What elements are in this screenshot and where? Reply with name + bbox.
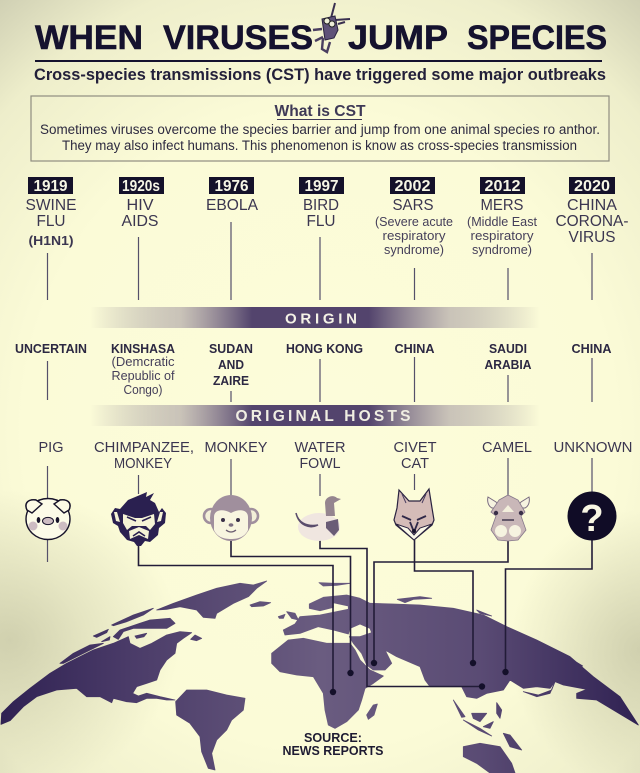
map: Americas: [1, 581, 271, 770]
timeline: 2020 china coronavirus: [556, 177, 628, 300]
timeline: 2002 SARS: [375, 177, 453, 300]
host labels: WATER: [294, 440, 346, 456]
host labels: PIG: [38, 440, 64, 456]
host labels: FOWL: [300, 456, 340, 472]
timeline: 1920s HIV AIDS: HIV: [126, 197, 154, 214]
timeline: 2002 SARS: SARS: [392, 197, 434, 214]
origin row labels: ZAIRE: [213, 374, 249, 388]
origin: Kinshasa: (Demcratic: [112, 355, 174, 369]
icon: civet cat: [394, 489, 434, 540]
panel: what is CST: [31, 96, 609, 161]
timeline: 1920s HIV AIDS: AIDS: [122, 213, 158, 230]
origin row labels: ARABIA: [484, 358, 532, 372]
timeline: 1919 swine flu: FLU: [36, 213, 66, 230]
title: SPECIES: [467, 19, 607, 57]
timeline: 2002 SARS: syndrome): [384, 243, 444, 257]
icon: virus mascot: [313, 3, 350, 52]
origin row labels: CHINA: [394, 342, 434, 356]
origin row labels: AND: [218, 358, 244, 372]
timeline: 1997 bird flu: BIRD: [303, 197, 339, 214]
title: [35, 19, 607, 57]
timeline: 1997 bird flu: 1997: [304, 178, 338, 195]
timeline: 1997 bird flu: FLU: [306, 213, 336, 230]
host labels: UNKNOWN: [554, 440, 632, 456]
timeline: 2002 SARS: (Severe acute: [375, 215, 453, 229]
timeline: 2012 MERS: [467, 177, 538, 300]
origin row labels: SUDAN: [209, 342, 253, 356]
timeline: 2020 china coronavirus: CHINA: [567, 197, 618, 214]
timeline: 1976 ebola: EBOLA: [206, 197, 259, 214]
host labels: CHIMPANZEE,: [94, 440, 194, 456]
connector: camel to Saudi Arabia: [371, 541, 508, 666]
source note: SOURCE:: [304, 730, 362, 745]
title rule: [35, 60, 602, 62]
map: Eurasia and Africa: [272, 583, 638, 773]
timeline: 2012 MERS: respiratory: [470, 229, 534, 243]
host labels: MONKEY: [114, 456, 172, 472]
icon: camel: [488, 495, 529, 541]
heading: origin band: [90, 307, 540, 328]
connector: unknown to China: [502, 540, 592, 675]
origin: Kinshasa: Congo): [124, 383, 162, 397]
origin: Kinshasa: KINSHASA: [111, 342, 175, 356]
timeline: 2002 SARS: respiratory: [382, 229, 446, 243]
origin: Kinshasa: Republic of: [112, 369, 175, 383]
title: JUMP: [348, 19, 448, 57]
title: VIRUSES: [163, 19, 313, 57]
heading: what is CST: What is CST: [274, 103, 366, 120]
world map: [1, 581, 638, 773]
timeline: 1919 swine flu: (H1N1): [28, 234, 74, 248]
icon: unknown question mark: [568, 492, 616, 540]
timeline: 2012 MERS: MERS: [480, 197, 524, 214]
host labels: CIVET: [394, 440, 437, 456]
timeline: 2012 MERS: 2012: [484, 178, 520, 195]
timeline: 2020 china coronavirus: CORONA-: [556, 213, 628, 230]
text: CST description: [40, 122, 600, 153]
timeline: 2012 MERS: (Middle East: [467, 215, 538, 229]
timeline: 2012 MERS: syndrome): [472, 243, 532, 257]
timeline: 1997 bird flu: [299, 177, 344, 300]
icon: chimpanzee: [111, 492, 166, 546]
timeline: 1920s HIV AIDS: 1920s: [122, 178, 160, 195]
timeline: 2020 china coronavirus: 2020: [574, 178, 610, 195]
icon: pig: [26, 498, 70, 540]
host labels: CAMEL: [482, 440, 532, 456]
connector: civet to China: [414, 540, 476, 666]
timeline: 1976 ebola: 1976: [214, 178, 249, 195]
icon: unknown question mark: ?: [580, 498, 604, 540]
connector: monkey to Sudan: [231, 541, 354, 676]
source note: NEWS REPORTS: [282, 743, 384, 758]
origin row labels: CHINA: [572, 342, 612, 356]
origin: Kinshasa: [111, 342, 175, 397]
host labels: CAT: [401, 456, 429, 472]
origin row labels: SAUDI: [489, 342, 527, 356]
connector: chimpanzee to Africa: [138, 546, 336, 695]
icon: water fowl: [296, 496, 341, 541]
timeline: 1919 swine flu: SWINE: [26, 197, 76, 214]
host stem lines: [48, 458, 592, 562]
timeline: 2002 SARS: 2002: [394, 178, 430, 195]
timeline: 2020 china coronavirus: VIRUS: [568, 229, 616, 246]
host labels: [38, 440, 632, 472]
timeline: 1919 swine flu: 1919: [34, 178, 68, 195]
timeline: 1919 swine flu: [26, 177, 76, 300]
timeline: 1976 ebola: [206, 177, 259, 300]
source note: [282, 730, 384, 758]
text: CST description: They may also infect humans. This phenomenon is know as cross-species transmission: [62, 138, 577, 153]
origin row labels: [15, 342, 612, 402]
timeline: 1920s HIV AIDS: [119, 177, 164, 300]
icon: monkey: [204, 495, 258, 541]
connector: water fowl to Hong Kong: [320, 540, 485, 690]
host labels: MONKEY: [204, 440, 268, 456]
heading: original hosts band: [90, 405, 540, 426]
origin row labels: HONG KONG: [286, 342, 363, 356]
heading: original hosts band: ORIGINAL HOSTS: [236, 408, 410, 425]
heading: origin band: ORIGIN: [285, 310, 357, 328]
text: CST description: Sometimes viruses overcome the species barrier and jump from one animal species ro anthor.: [40, 122, 600, 137]
subtitle: Cross-species transmissions (CST) have triggered some major outbreaks: [34, 66, 606, 84]
origin row labels: UNCERTAIN: [15, 342, 87, 356]
title: WHEN: [35, 19, 143, 57]
